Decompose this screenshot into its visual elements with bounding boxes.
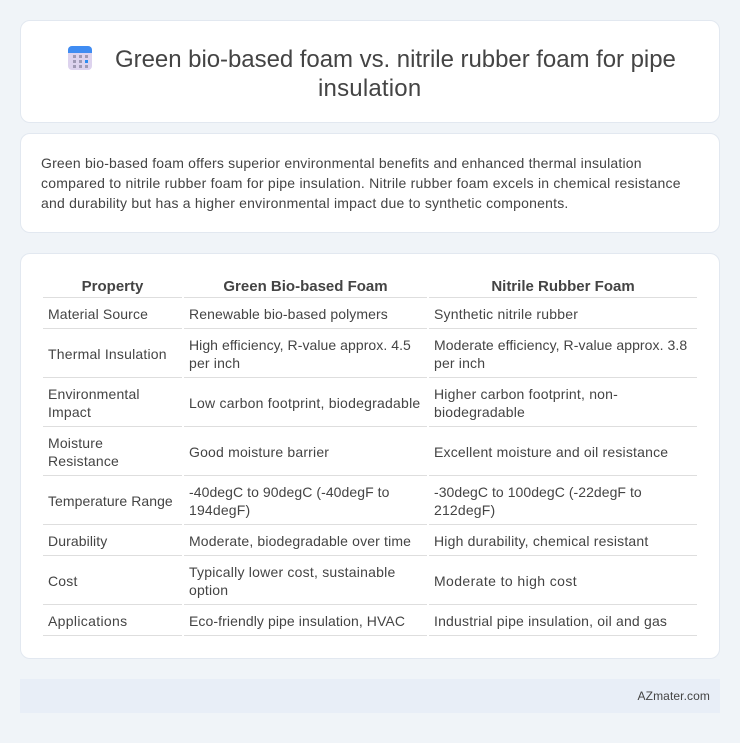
row: thermal insulation: High efficiency, R-value approx. 4.5 (189, 337, 411, 353)
row: environmental impact: Low carbon footprint, biodegradable (189, 395, 420, 411)
icon: calendar (68, 46, 92, 70)
table header: Property (82, 278, 143, 295)
row: durability: Durability (48, 533, 107, 549)
row: cost: Cost (48, 573, 78, 589)
row: applications (48, 613, 667, 629)
row: thermal insulation: Thermal Insulation (48, 346, 167, 362)
row: thermal insulation: per inch (434, 355, 485, 371)
footer text: AZmater.com (638, 689, 710, 703)
row: temperature range: Temperature Range (48, 493, 173, 509)
summary text: compared to nitrile rubber foam for pipe insulation. Nitrile rubber foam excels in chemical resistance (41, 175, 681, 191)
row: thermal insulation (48, 337, 687, 371)
row: environmental impact: biodegradable (434, 404, 525, 420)
row: environmental impact: Higher carbon footprint, non- (434, 386, 618, 402)
comparison table (43, 278, 697, 636)
summary text: Green bio-based foam offers superior environmental benefits and enhanced thermal insulation (41, 155, 642, 171)
row: applications: Applications (48, 613, 127, 629)
row: moisture resistance: Good moisture barrier (189, 444, 329, 460)
row: temperature range: 194degF) (189, 502, 250, 518)
row: material source: Material Source (48, 306, 148, 322)
row: temperature range: -30degC to 100degC (-22degF to (434, 484, 642, 500)
row: cost: Typically lower cost, sustainable (189, 564, 395, 580)
row: environmental impact: Environmental (48, 386, 140, 402)
table header: Nitrile Rubber Foam (491, 278, 635, 295)
title: Green bio-based foam vs. nitrile rubber foam for pipe (115, 46, 676, 73)
table header: Green Bio-based Foam (223, 278, 388, 295)
title: insulation (318, 75, 421, 102)
row: durability: Moderate, biodegradable over time (189, 533, 411, 549)
row: moisture resistance: Resistance (48, 453, 119, 469)
row: moisture resistance: Excellent moisture and oil resistance (434, 444, 668, 460)
row: temperature range: -40degC to 90degC (-40degF to (189, 484, 390, 500)
table header (82, 278, 635, 295)
panel: title card (20, 20, 720, 123)
row: durability (48, 533, 648, 549)
row: applications: Industrial pipe insulation, oil and gas (434, 613, 667, 629)
title (115, 46, 676, 102)
row: cost: Moderate to high cost (434, 573, 577, 589)
row: applications: Eco-friendly pipe insulation, HVAC (189, 613, 405, 629)
row: temperature range (48, 484, 642, 518)
row: thermal insulation: Moderate efficiency, R-value approx. 3.8 (434, 337, 687, 353)
row: cost (48, 564, 577, 598)
row: moisture resistance: Moisture (48, 435, 103, 451)
row: environmental impact: Impact (48, 404, 91, 420)
footer bar (20, 679, 720, 713)
panel: comparison table (20, 253, 720, 659)
summary text (41, 155, 681, 211)
row: durability: High durability, chemical resistant (434, 533, 648, 549)
row: cost: option (189, 582, 228, 598)
summary text: and durability but has a higher environmental impact due to synthetic components. (41, 195, 569, 211)
row: material source (48, 306, 578, 322)
row: material source: Renewable bio-based polymers (189, 306, 388, 322)
row: moisture resistance (48, 435, 668, 469)
panel: summary (20, 133, 720, 233)
row: environmental impact (48, 386, 618, 420)
row: thermal insulation: per inch (189, 355, 240, 371)
row: temperature range: 212degF) (434, 502, 495, 518)
row: material source: Synthetic nitrile rubber (434, 306, 578, 322)
